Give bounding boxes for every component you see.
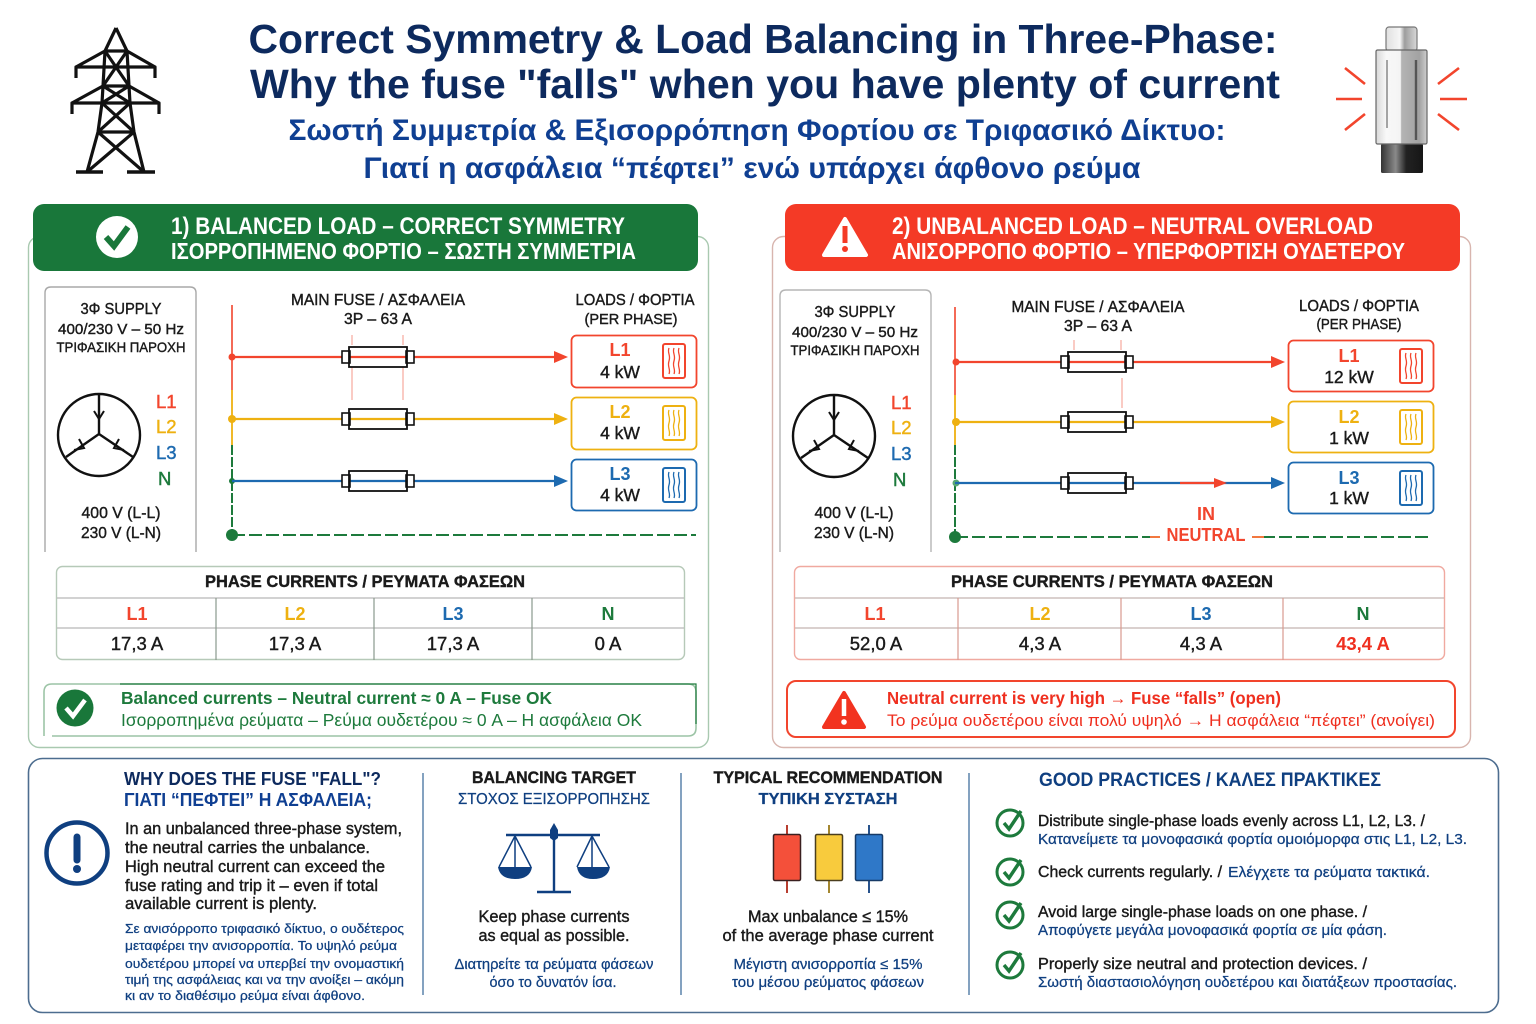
icon: three fuses: [774, 825, 882, 893]
section: why the fuse falls: μεταφέρει την ανισορροπία. Το υψηλό ρεύμα: [125, 938, 398, 953]
table: phase currents balanced: N: [602, 604, 614, 624]
section: balancing target: Διατηρείτε τα ρεύματα φάσεων: [454, 957, 654, 973]
section: why the fuse falls: κι αν το διαθέσιμο ρεύμα είναι άφθονο.: [125, 988, 365, 1003]
wiring diagram: balanced: [226, 292, 696, 541]
practice item 3: Avoid large single-phase loads on one phase. /: [1038, 904, 1368, 921]
table: phase currents unbalanced: L1: [864, 604, 886, 624]
section: why the fuse falls: Σε ανισόρροπο τριφασικό δίκτυο, ο ουδέτερος: [125, 921, 404, 936]
table: phase currents unbalanced: L2: [1029, 604, 1051, 624]
practice item 4: [997, 952, 1457, 991]
icon: transmission tower: [72, 28, 159, 172]
section: why the fuse falls: ΓΙΑΤΙ “ΠΕΦΤΕΙ” Η ΑΣΦΑΛΕΙΑ;: [124, 790, 372, 810]
section: why the fuse falls: WHY DOES THE FUSE "FALL"?: [124, 769, 381, 789]
callout: fuse falls: Neutral current is very high → Fuse “falls” (open): [887, 688, 1281, 708]
icon: balance scale: [498, 823, 610, 892]
panel header: unbalanced: ΑΝΙΣΟΡΡΟΠΟ ΦΟΡΤΙΟ – ΥΠΕΡΦΟΡΤΙΣΗ ΟΥΔΕΤΕΡΟΥ: [892, 238, 1405, 264]
callout: fuse falls: [787, 681, 1455, 737]
panel header: balanced: [33, 204, 698, 271]
supply block: unbalanced: [780, 290, 931, 552]
section: why the fuse falls: τιμή της ασφάλειας και να την ανοίξει – ακόμη: [125, 972, 404, 987]
loads: unbalanced: 12 kW: [1324, 367, 1374, 387]
label: neutral current: IN: [1197, 504, 1215, 524]
table: phase currents balanced: 17,3 A: [269, 633, 322, 654]
supply block: unbalanced: L2: [891, 417, 912, 438]
section: typical recommendation: of the average phase current: [722, 927, 934, 945]
table: phase currents unbalanced: 4,3 A: [1019, 633, 1062, 654]
callout: fuse ok: [44, 684, 696, 736]
table: phase currents unbalanced: PHASE CURRENTS / ΡΕΥΜΑΤΑ ΦΑΣΕΩΝ: [951, 572, 1273, 591]
supply block: unbalanced: N: [893, 469, 906, 490]
practice item 4: Properly size neutral and protection devices. /: [1038, 956, 1368, 973]
table: phase currents unbalanced: 4,3 A: [1180, 633, 1223, 654]
callout: fuse ok: Ισορροπημένα ρεύματα – Ρεύμα ουδετέρου ≈ 0 A – Η ασφάλεια OK: [121, 710, 642, 730]
section: why the fuse falls: fuse rating and trip it – even if total: [125, 877, 378, 895]
table: phase currents balanced: 0 A: [595, 633, 622, 654]
loads: balanced: 4 kW: [600, 362, 640, 382]
loads: balanced: L3: [609, 464, 631, 484]
panel header: balanced: 1) BALANCED LOAD – CORRECT SYMMETRY: [171, 213, 625, 240]
loads: balanced: 4 kW: [600, 423, 640, 443]
loads: unbalanced: 1 kW: [1329, 488, 1369, 508]
title: Σωστή Συμμετρία & Εξισορρόπηση Φορτίου σε Τριφασικό Δίκτυο:: [288, 114, 1226, 147]
loads: unbalanced: LOADS / ΦΟΡΤΙΑ: [1299, 298, 1420, 315]
section: typical recommendation: Max unbalance ≤ 15%: [748, 908, 908, 926]
label: neutral current: [1166, 504, 1246, 545]
icon: blown fuse: [1336, 27, 1467, 173]
loads: balanced: LOADS / ΦΟΡΤΙΑ: [576, 292, 695, 309]
wiring diagram: unbalanced: 3P – 63 A: [1064, 318, 1133, 335]
practice item 3: Αποφύγετε μεγάλα μονοφασικά φορτία σε μία φάση.: [1038, 922, 1387, 939]
title: Correct Symmetry & Load Balancing in Three-Phase:: [248, 16, 1278, 62]
table: phase currents balanced: L1: [126, 604, 148, 624]
practice item 4: Σωστή διαστασιολόγηση ουδετέρου και διατάξεων προστασίας.: [1038, 974, 1457, 991]
wiring diagram: balanced: 3P – 63 A: [344, 311, 413, 328]
label: neutral current: NEUTRAL: [1166, 525, 1246, 545]
practice item 1: [997, 810, 1467, 848]
supply block: balanced: ΤΡΙΦΑΣΙΚΗ ΠΑΡΟΧΗ: [56, 340, 186, 355]
section: why the fuse falls: High neutral current can exceed the: [125, 858, 385, 876]
supply block: balanced: N: [158, 468, 171, 489]
title: Why the fuse "falls" when you have plenty of current: [250, 61, 1280, 107]
panel header: unbalanced: 2) UNBALANCED LOAD – NEUTRAL OVERLOAD: [892, 213, 1373, 240]
practice item 3: [997, 902, 1387, 939]
section: typical recommendation: Μέγιστη ανισορροπία ≤ 15%: [734, 957, 923, 973]
table: phase currents balanced: 17,3 A: [427, 633, 480, 654]
practice item 2: [997, 859, 1430, 885]
supply block: balanced: L2: [156, 416, 177, 437]
panel: unbalanced load: [772, 204, 1470, 748]
practice item 2: Check currents regularly. /: [1038, 864, 1223, 881]
table: phase currents unbalanced: L3: [1190, 604, 1212, 624]
supply block: balanced: 230 V (L-N): [81, 525, 161, 542]
section: why the fuse falls: the neutral carries the unbalance.: [125, 839, 370, 857]
panel: bottom info: [28, 758, 1498, 1012]
supply block: balanced: 400/230 V – 50 Hz: [58, 321, 184, 338]
section: balancing target: ΣΤΟΧΟΣ ΕΞΙΣΟΡΡΟΠΗΣΗΣ: [458, 791, 650, 808]
table: phase currents balanced: [56, 566, 684, 660]
title: Γιατί η ασφάλεια “πέφτει” ενώ υπάρχει άφθονο ρεύμα: [364, 152, 1141, 185]
practice item 1: Κατανείμετε τα μονοφασικά φορτία ομοιόμορφα στις L1, L2, L3.: [1038, 831, 1467, 848]
supply block: unbalanced: L1: [891, 392, 912, 413]
table: phase currents balanced: 17,3 A: [111, 633, 164, 654]
supply block: balanced: [45, 287, 196, 552]
section: typical recommendation: TYPICAL RECOMMENDATION: [714, 768, 942, 787]
panel header: balanced: ΙΣΟΡΡΟΠΗΜΕΝΟ ΦΟΡΤΙΟ – ΣΩΣΤΗ ΣΥΜΜΕΤΡΙΑ: [171, 238, 636, 264]
supply block: balanced: L1: [156, 391, 177, 412]
supply block: unbalanced: L3: [891, 443, 912, 464]
section: why the fuse falls: available current is plenty.: [125, 895, 317, 913]
section: balancing target: as equal as possible.: [478, 927, 630, 945]
section: balancing target: BALANCING TARGET: [472, 768, 637, 787]
wiring diagram: unbalanced: [949, 299, 1431, 543]
loads: balanced: (PER PHASE): [584, 312, 678, 328]
supply block: unbalanced: ΤΡΙΦΑΣΙΚΗ ΠΑΡΟΧΗ: [790, 343, 920, 358]
supply block: unbalanced: 400/230 V – 50 Hz: [792, 324, 918, 341]
section: balancing target: όσο το δυνατόν ίσα.: [490, 975, 616, 991]
supply block: unbalanced: 3Φ SUPPLY: [814, 304, 896, 321]
section: balancing target: Keep phase currents: [478, 908, 630, 926]
supply block: balanced: L3: [156, 442, 177, 463]
supply block: balanced: 3Φ SUPPLY: [80, 301, 162, 318]
loads: balanced: 4 kW: [600, 485, 640, 505]
loads: unbalanced: [1288, 298, 1434, 514]
section: good practices: GOOD PRACTICES / ΚΑΛΕΣ ΠΡΑΚΤΙΚΕΣ: [1039, 770, 1381, 791]
table: phase currents unbalanced: N: [1356, 604, 1370, 624]
section: typical recommendation: του μέσου ρεύματος φάσεων: [732, 975, 924, 991]
loads: unbalanced: 1 kW: [1329, 428, 1369, 448]
table: phase currents balanced: PHASE CURRENTS / ΡΕΥΜΑΤΑ ΦΑΣΕΩΝ: [205, 572, 525, 591]
section: good practices: [997, 770, 1467, 991]
callout: fuse ok: Balanced currents – Neutral current ≈ 0 A – Fuse OK: [121, 688, 552, 708]
table: phase currents balanced: L2: [284, 604, 306, 624]
section: why the fuse falls: In an unbalanced three-phase system,: [125, 820, 402, 838]
loads: balanced: L1: [609, 340, 631, 360]
section: why the fuse falls: [46, 769, 404, 1003]
loads: unbalanced: L2: [1338, 407, 1360, 427]
section: typical recommendation: ΤΥΠΙΚΗ ΣΥΣΤΑΣΗ: [758, 791, 898, 808]
panel: balanced load: [28, 204, 708, 748]
section: typical recommendation: [714, 768, 942, 991]
supply block: balanced: 400 V (L-L): [82, 505, 160, 522]
practice item 1: Distribute single-phase loads evenly across L1, L2, L3. /: [1038, 813, 1426, 830]
title: [248, 16, 1280, 185]
panel header: unbalanced: [785, 204, 1460, 271]
wiring diagram: unbalanced: MAIN FUSE / ΑΣΦΑΛΕΙΑ: [1012, 299, 1185, 316]
table: phase currents unbalanced: 43,4 A: [1336, 633, 1390, 654]
supply block: unbalanced: 230 V (L-N): [814, 525, 894, 542]
callout: fuse falls: Το ρεύμα ουδετέρου είναι πολύ υψηλό → Η ασφάλεια “πέφτει” (ανοίγει): [887, 711, 1435, 730]
loads: balanced: [572, 292, 696, 510]
supply block: unbalanced: 400 V (L-L): [814, 505, 894, 522]
section: balancing target: [454, 768, 654, 991]
table: phase currents balanced: L3: [442, 604, 464, 624]
wiring diagram: balanced: MAIN FUSE / ΑΣΦΑΛΕΙΑ: [291, 292, 466, 309]
loads: unbalanced: L1: [1338, 346, 1360, 366]
practice item 2: Ελέγχετε τα ρεύματα τακτικά.: [1228, 864, 1430, 881]
table: phase currents unbalanced: [794, 566, 1444, 660]
table: phase currents unbalanced: 52,0 A: [850, 633, 903, 654]
loads: unbalanced: (PER PHASE): [1316, 317, 1402, 333]
loads: balanced: L2: [609, 402, 631, 422]
section: why the fuse falls: ουδετέρου μπορεί να υπερβεί την ονομαστική: [125, 956, 404, 971]
loads: unbalanced: L3: [1338, 468, 1360, 488]
